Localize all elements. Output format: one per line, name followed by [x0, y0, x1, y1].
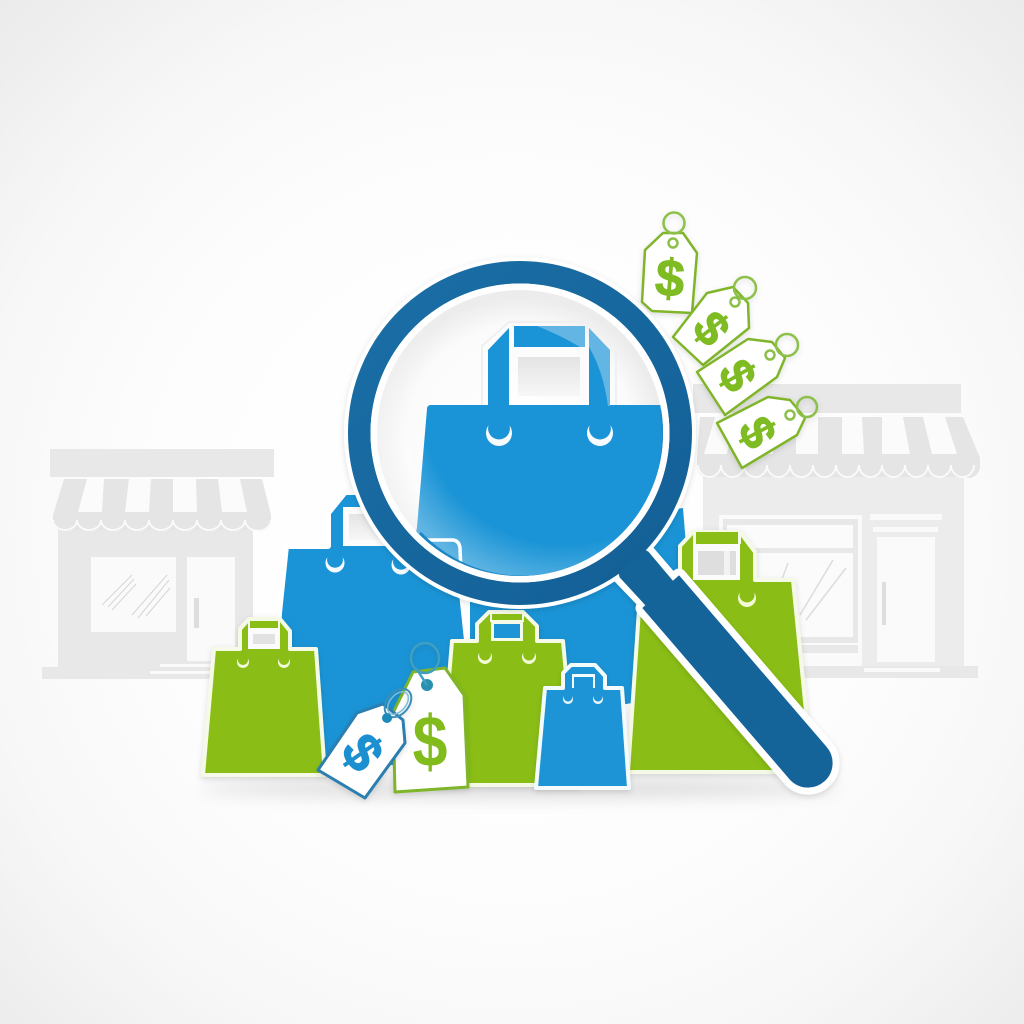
tag 4: $: [727, 408, 786, 457]
right green bag: [628, 530, 812, 772]
tag 4: [717, 397, 817, 468]
middle green bag: [440, 610, 576, 785]
price tag: blue dollar: $: [329, 723, 395, 782]
magnifier outline halo: [344, 257, 832, 787]
price tag: large green dollar: [393, 643, 468, 792]
tag 3: [697, 334, 798, 415]
magnifier handle: [610, 530, 832, 787]
tag 1: [642, 212, 697, 313]
lens contents: [377, 290, 663, 576]
large blue bag, left: [277, 490, 474, 768]
magnified bag: [416, 321, 663, 576]
tag 1: $: [653, 249, 687, 309]
tag 2: [673, 277, 756, 365]
lens glare: [537, 326, 610, 406]
blue bag behind, right of lens: [470, 508, 686, 730]
left green bag: [203, 618, 325, 775]
left storefront: [42, 449, 274, 679]
magnifier ring: [359, 272, 681, 594]
magnifying glass: [344, 257, 832, 787]
price tag: large green dollar: $: [413, 702, 447, 782]
tag 3: $: [707, 351, 766, 401]
tag 2: $: [682, 302, 740, 356]
corner of rear bag seen in lens: [423, 538, 462, 564]
ground shadow: [200, 778, 840, 798]
price tag: blue dollar: [318, 684, 417, 798]
price tags, top right: [642, 212, 817, 468]
small blue bag: [536, 665, 629, 788]
right storefront: [693, 384, 980, 678]
